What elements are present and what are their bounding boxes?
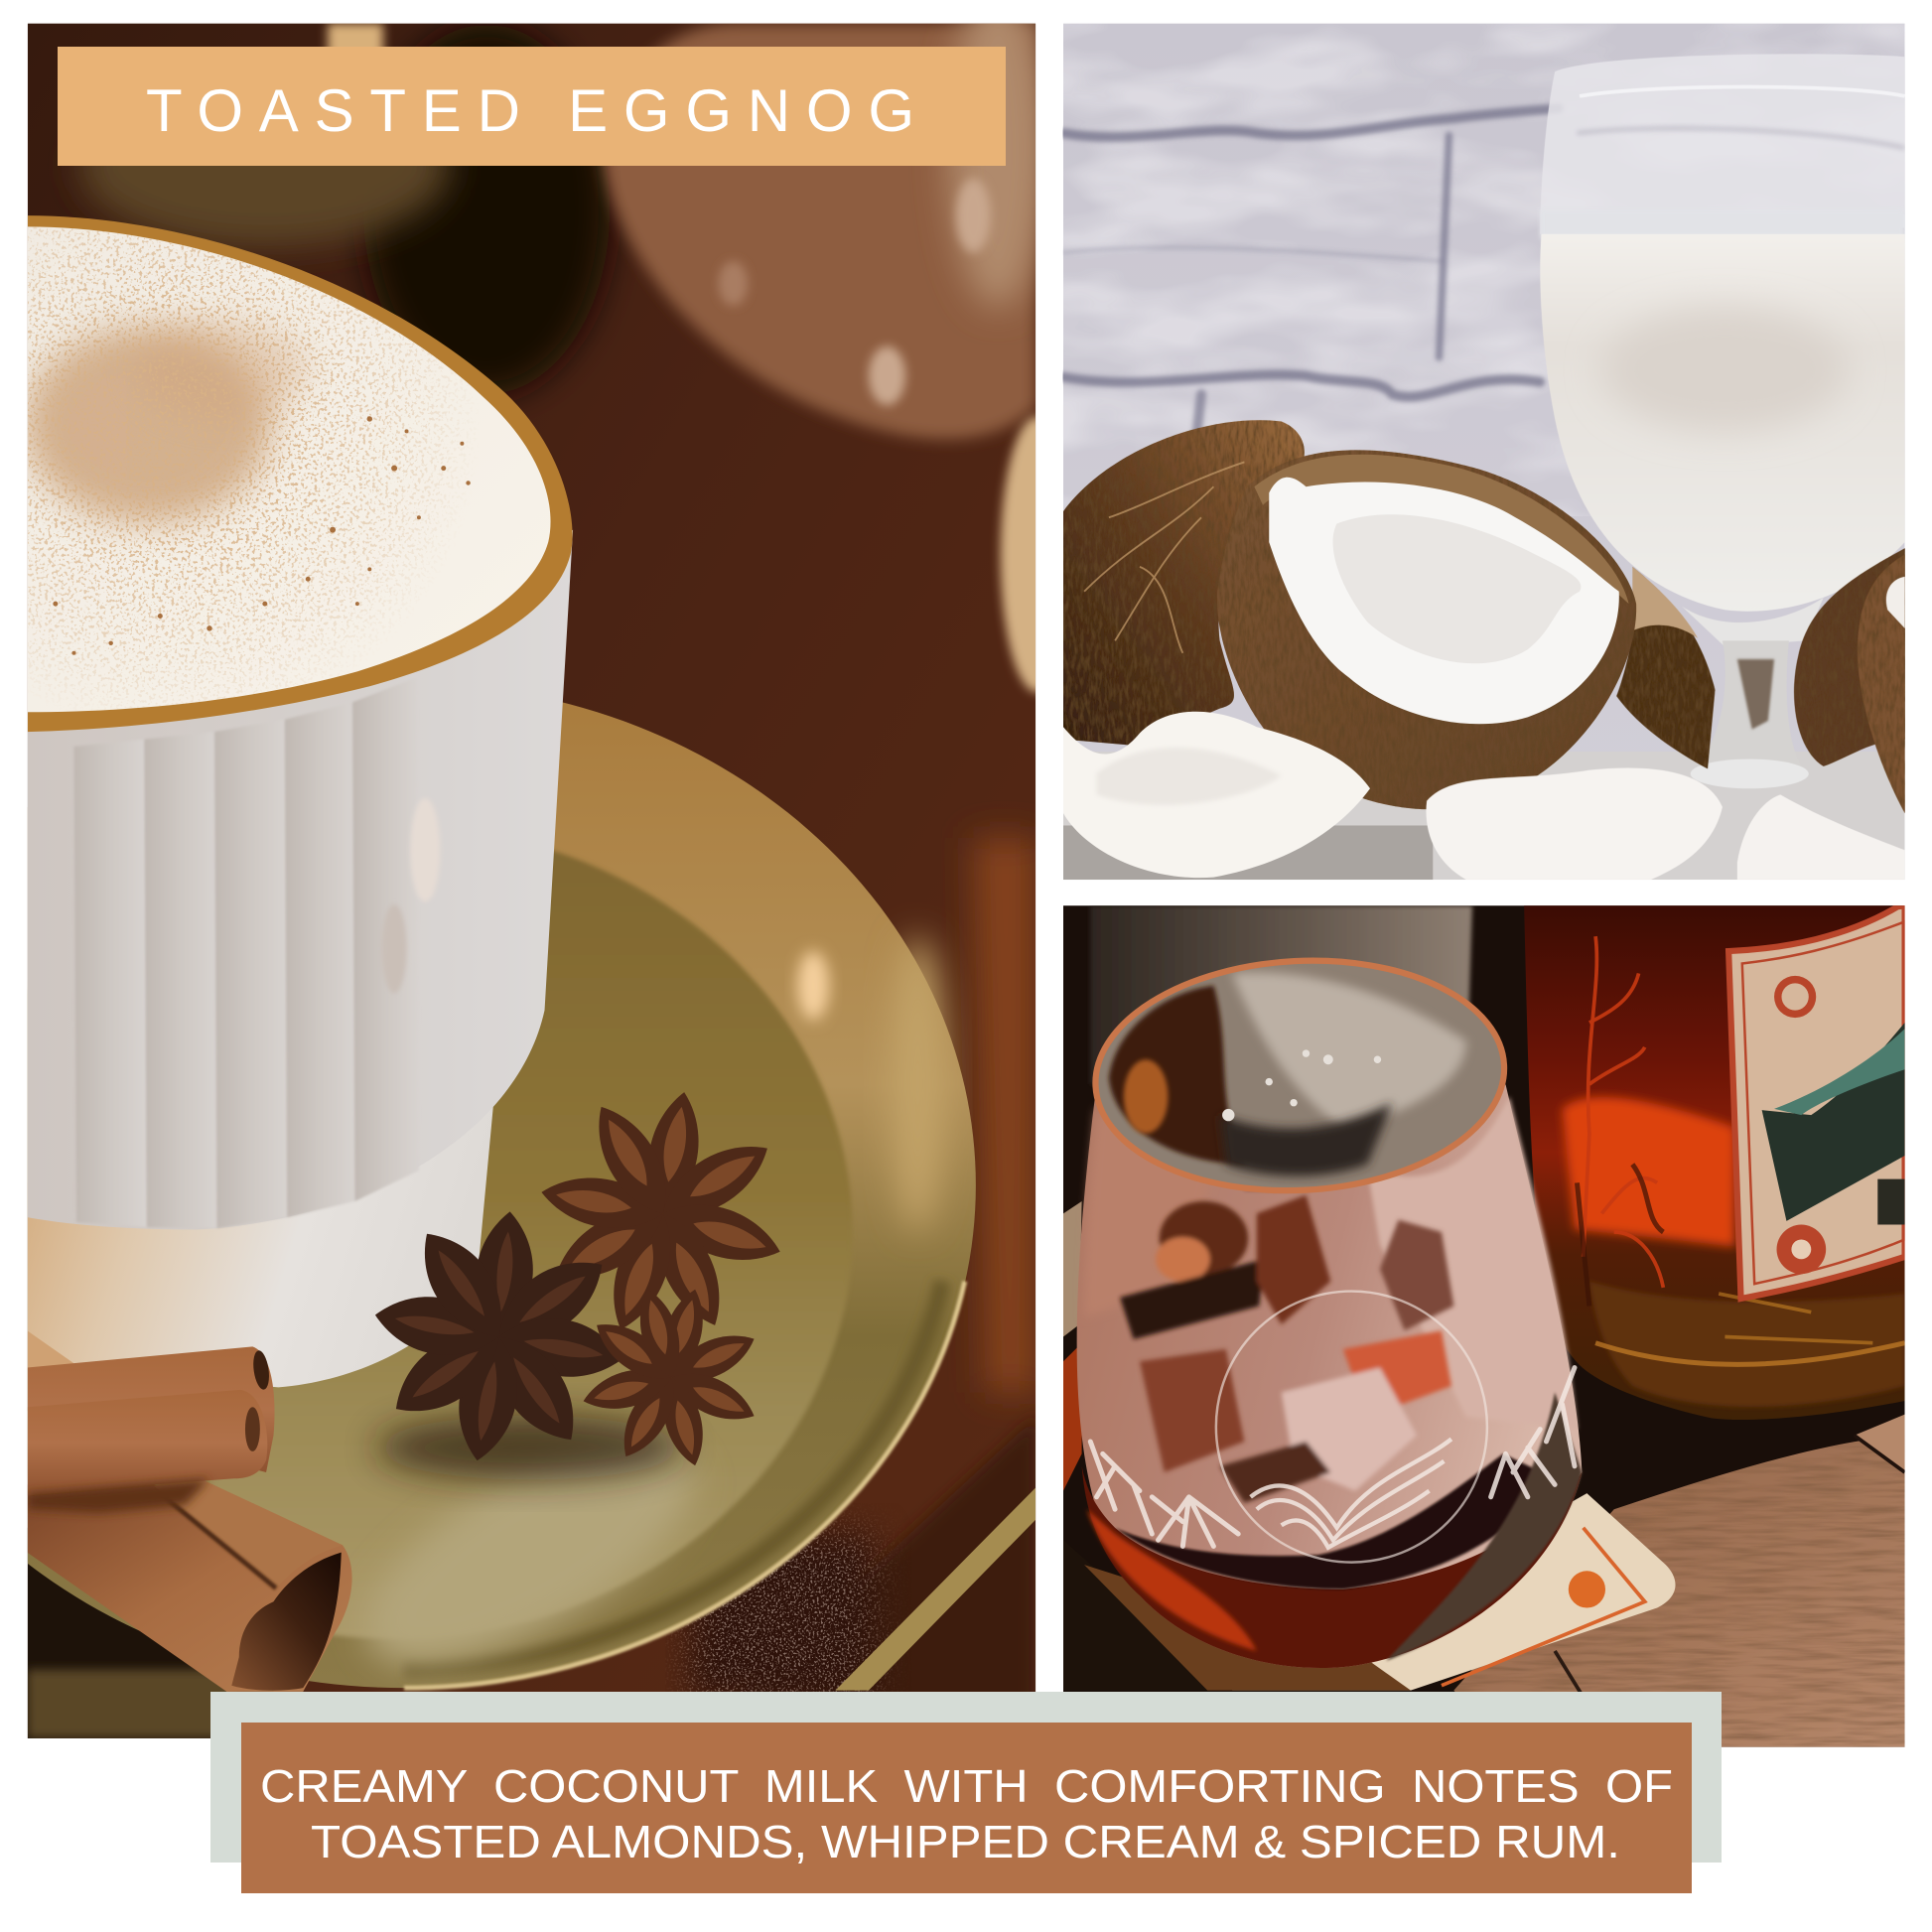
panel: rum glass and bottle photo xyxy=(1063,905,1905,1747)
caption text xyxy=(260,1760,1673,1867)
fluted cup body xyxy=(27,530,573,1230)
title banner xyxy=(58,47,1006,166)
spoon handle xyxy=(835,1487,1036,1691)
brass plate xyxy=(0,683,976,1738)
glass of milk xyxy=(1540,54,1905,788)
right coconut xyxy=(1794,548,1905,813)
title: TOASTED EGGNOG xyxy=(146,77,914,144)
coaster xyxy=(1063,1493,1676,1691)
table xyxy=(1063,752,1905,880)
cup base xyxy=(27,1084,495,1387)
rum bottle xyxy=(1524,905,1905,1420)
star anise xyxy=(360,1071,808,1491)
blurred cookie xyxy=(604,0,1074,692)
caption backing panel xyxy=(210,1692,1722,1863)
caption text: TOASTED ALMONDS, WHIPPED CREAM & SPICED RUM. xyxy=(311,1816,1620,1867)
panel: eggnog cup photo xyxy=(0,0,1074,1738)
metal shaker xyxy=(1090,905,1472,1116)
rum glass xyxy=(1077,950,1582,1668)
cinnamon sticks xyxy=(27,1330,352,1692)
small coconut piece xyxy=(1616,567,1715,768)
coconut flesh chunks xyxy=(1063,712,1905,880)
brick wall xyxy=(1063,24,1905,880)
caption box xyxy=(241,1723,1692,1893)
wooden table xyxy=(1063,1201,1905,1747)
ice cubes xyxy=(1120,1115,1453,1503)
caption text: CREAMY COCONUT MILK WITH COMFORTING NOTES OF xyxy=(260,1760,1673,1812)
glass mouth xyxy=(1089,950,1510,1200)
left coconut xyxy=(1063,420,1305,746)
foam with cinnamon xyxy=(28,226,550,713)
split coconut with flesh xyxy=(1217,450,1636,809)
glass body xyxy=(1077,1084,1582,1668)
panel: coconut milk photo xyxy=(1063,24,1905,880)
etched logo and seaweed xyxy=(1090,1292,1575,1563)
liquid at base xyxy=(1082,1466,1582,1668)
cup rim xyxy=(27,215,573,732)
bottle label xyxy=(1728,905,1905,1299)
